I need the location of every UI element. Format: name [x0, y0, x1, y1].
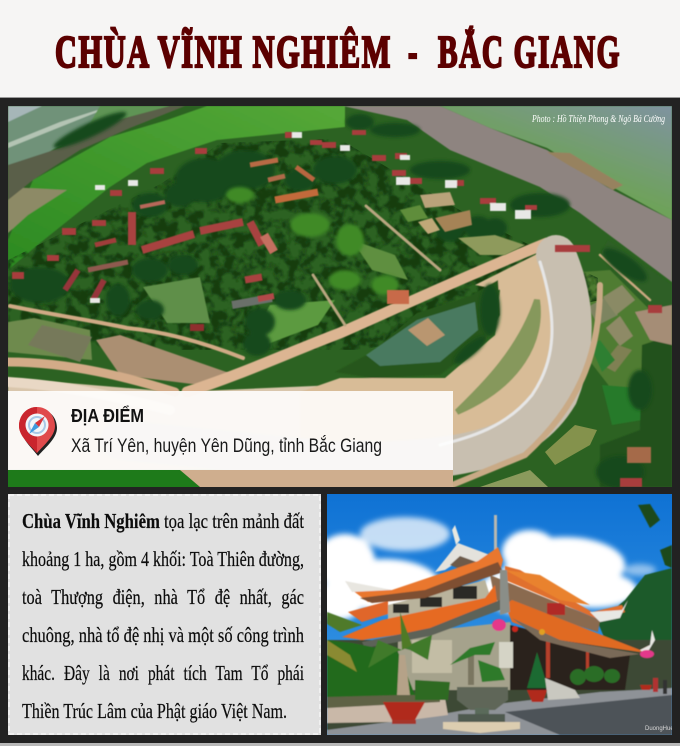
description text: Thiền Trúc Lâm của Phật giáo Việt Nam. [22, 699, 287, 723]
village roofs and buildings [65, 160, 318, 305]
right tree [598, 567, 672, 641]
icon: map pin with compass [19, 407, 57, 456]
left fields [8, 318, 92, 360]
bronze urn [457, 687, 508, 710]
sandbar [547, 152, 623, 190]
tree clusters [10, 107, 652, 488]
location callout [8, 391, 453, 470]
river [343, 106, 672, 282]
gable [434, 542, 488, 572]
lower base behind everything [327, 640, 672, 735]
title band [0, 0, 680, 98]
description text: toà Thượng điện, nhà Tổ đệ nhất, gác [22, 585, 304, 609]
bonsai [527, 652, 548, 688]
clouds [315, 517, 656, 620]
left village strip [8, 106, 185, 200]
dark tree band far right [662, 304, 672, 307]
pond with tree rim [335, 280, 500, 378]
pond plot [408, 318, 445, 346]
title: - [408, 26, 419, 77]
description text: khác. Đây là nơi phát tích Tam Tổ phái [22, 661, 304, 685]
river far bank [440, 106, 672, 220]
photo: temple building [315, 494, 674, 735]
photo watermark: DuongHue [645, 726, 674, 732]
fields right [582, 270, 665, 400]
red pots [383, 702, 425, 720]
visitors [653, 678, 658, 692]
palm tree [397, 655, 410, 695]
grass court [143, 277, 210, 323]
lower right roof [505, 600, 650, 652]
center planter palm [468, 655, 474, 685]
steps [545, 678, 580, 700]
roads [8, 206, 650, 490]
description text: khoảng 1 ha, gồm 4 khối: Toà Thiên đường, [22, 547, 304, 571]
hazy fields top-left [8, 106, 100, 166]
lower building walls [397, 622, 512, 691]
description text: Chùa Vĩnh Nghiêm tọa lạc trên mảnh đất [22, 509, 304, 533]
mottled tree canopy [8, 125, 598, 350]
farm plots near village [435, 210, 472, 232]
description panel [8, 494, 321, 735]
curved concrete road [452, 234, 592, 476]
photo: aerial view of the pagoda [8, 106, 672, 490]
sand crescent [303, 254, 552, 436]
lower left roof [342, 585, 498, 640]
spire [494, 515, 497, 557]
location heading: ĐỊA ĐIỂM [71, 405, 144, 426]
lanterns [492, 619, 506, 631]
upper right roof [505, 566, 625, 620]
shrubs [570, 669, 586, 685]
back left roof [348, 601, 388, 622]
brown patch [8, 187, 67, 233]
upper walls [387, 580, 490, 620]
large green field [8, 106, 345, 270]
location address: Xã Trí Yên, huyện Yên Dũng, tỉnh Bắc Giang [71, 435, 382, 457]
green-water strip [457, 300, 538, 412]
upper left roof [352, 547, 503, 602]
description text [22, 509, 304, 723]
bottom strip [0, 743, 680, 746]
description text: chuông, nhà tổ đệ nhị và một số công trình [22, 623, 304, 647]
left foliage [327, 640, 415, 698]
under-callout pale ground [8, 380, 318, 470]
ground [327, 688, 672, 735]
title: CHÙA VĨNH NGHIÊM [55, 26, 392, 77]
